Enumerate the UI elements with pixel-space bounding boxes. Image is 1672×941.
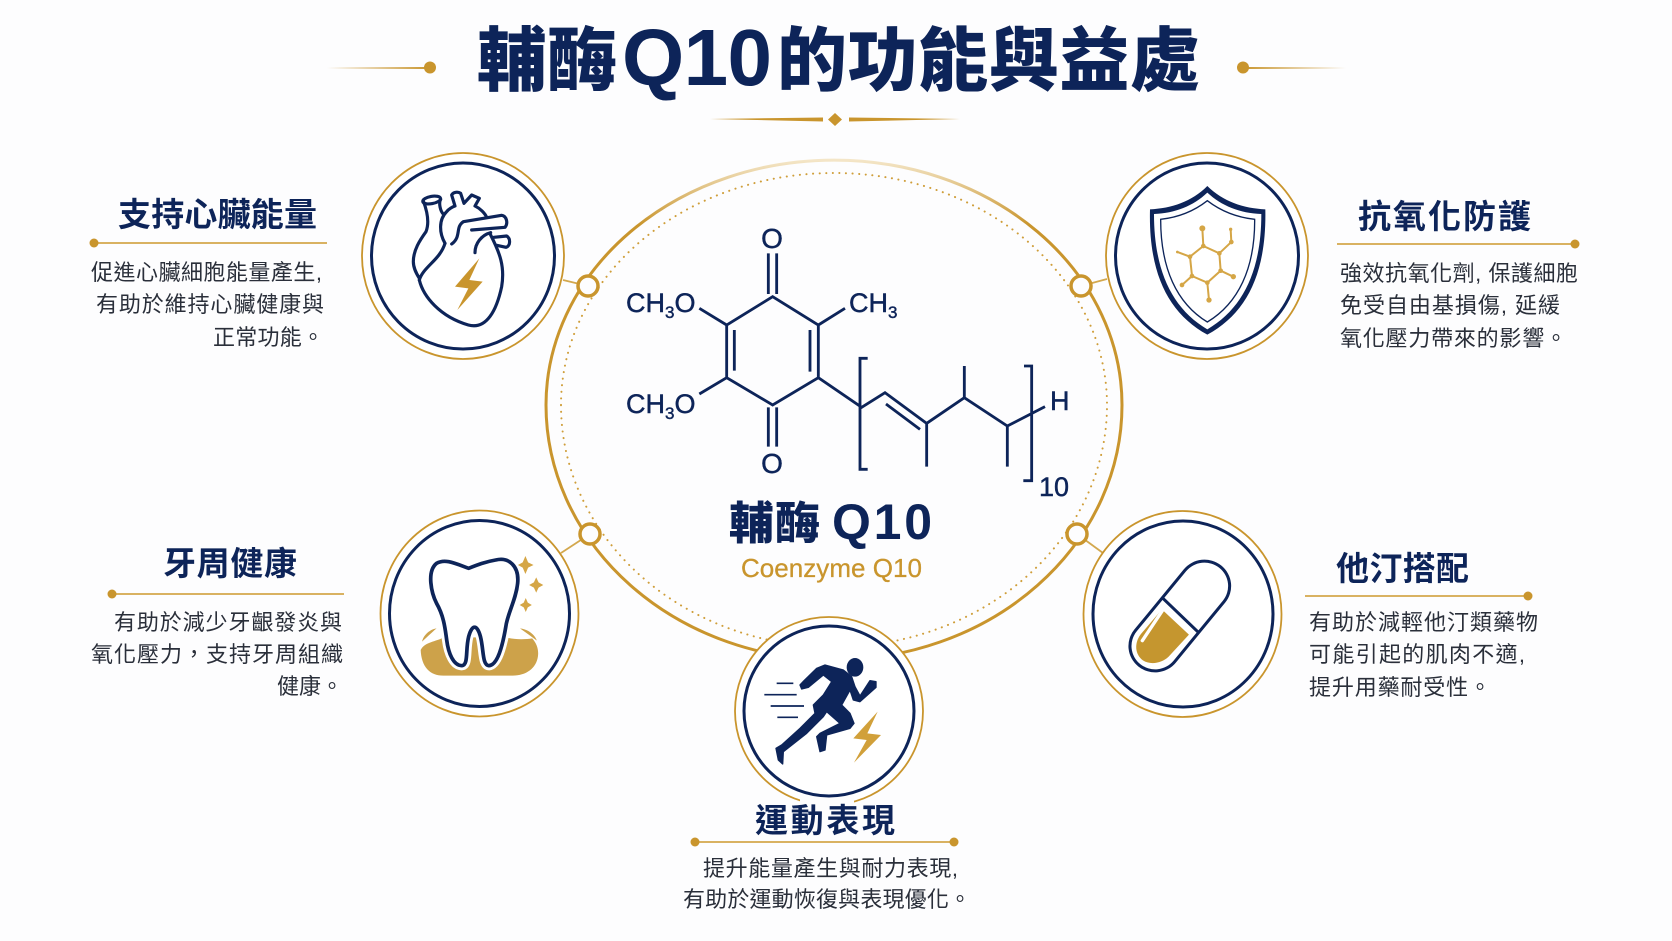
molecular structure of coenzyme Q10: O bbox=[761, 223, 783, 254]
molecular structure of coenzyme Q10: H bbox=[1050, 386, 1070, 416]
panel: heart bbox=[90, 153, 564, 359]
description bbox=[1340, 261, 1578, 353]
molecular structure of coenzyme Q10: O bbox=[674, 389, 695, 419]
molecular structure of coenzyme Q10: 3 bbox=[665, 303, 674, 322]
molecular structure of coenzyme Q10: 3 bbox=[665, 404, 674, 423]
heading: 運動表現: 運動表現 bbox=[755, 802, 895, 839]
panel: gum health bbox=[91, 510, 578, 716]
connector lines bbox=[561, 279, 1107, 553]
center label: 輔酶 bbox=[729, 498, 820, 549]
description bbox=[1309, 610, 1538, 702]
heading rule bbox=[108, 590, 344, 598]
description: 強效抗氧化劑, 保護細胞 bbox=[1340, 261, 1578, 286]
description bbox=[91, 260, 324, 352]
icon: heart bbox=[362, 153, 564, 359]
heading: 抗氧化防護: 抗氧化防護 bbox=[1358, 198, 1531, 235]
panel: athletic performance bbox=[683, 617, 971, 914]
heading rule bbox=[690, 838, 958, 846]
description: 有助於運動恢復與表現優化。 bbox=[683, 882, 971, 914]
description: 正常功能。 bbox=[213, 320, 324, 352]
title: Q10 bbox=[622, 13, 772, 102]
description: 健康。 bbox=[277, 669, 343, 701]
molecular structure of coenzyme Q10: O bbox=[674, 288, 695, 318]
title ornaments bbox=[327, 62, 1346, 126]
central ring bbox=[546, 160, 1122, 660]
panel: antioxidant bbox=[1106, 153, 1580, 359]
center label bbox=[729, 494, 932, 583]
description: 免受自由基損傷, 延緩 bbox=[1340, 293, 1560, 318]
title bbox=[477, 13, 1200, 102]
molecular structure of coenzyme Q10 bbox=[626, 223, 1070, 502]
molecular structure of coenzyme Q10: 10 bbox=[1039, 472, 1069, 502]
description: 有助於減輕他汀類藥物 bbox=[1309, 610, 1538, 635]
heading rule bbox=[1337, 240, 1580, 248]
icon: shield with molecule bbox=[1106, 153, 1308, 359]
panel: statin pairing bbox=[1084, 511, 1538, 717]
description bbox=[683, 856, 971, 914]
heading: 支持心臟能量: 支持心臟能量 bbox=[118, 196, 317, 233]
title: 的功能與益處 bbox=[777, 22, 1200, 100]
description bbox=[91, 610, 343, 701]
description: 提升用藥耐受性。 bbox=[1309, 670, 1491, 702]
description: 提升能量產生與耐力表現, bbox=[703, 856, 958, 881]
heading: 牙周健康: 牙周健康 bbox=[163, 545, 297, 582]
icon: tooth bbox=[380, 510, 578, 716]
description: 有助於維持心臟健康與 bbox=[96, 292, 324, 317]
title: 輔酶 bbox=[477, 22, 617, 100]
description: 氧化壓力帶來的影響。 bbox=[1340, 321, 1567, 353]
molecular structure of coenzyme Q10: CH bbox=[626, 389, 665, 419]
heading: 他汀搭配: 他汀搭配 bbox=[1336, 550, 1469, 587]
center label: Q10 bbox=[832, 494, 932, 550]
center label: Coenzyme Q10 bbox=[741, 553, 922, 583]
icon: capsule bbox=[1084, 511, 1282, 717]
molecular structure of coenzyme Q10: 3 bbox=[888, 303, 897, 322]
description: 可能引起的肌肉不適, bbox=[1309, 642, 1525, 667]
description: 有助於減少牙齦發炎與 bbox=[114, 610, 342, 635]
molecular structure of coenzyme Q10: CH bbox=[626, 288, 665, 318]
description: 氧化壓力，支持牙周組織 bbox=[91, 637, 343, 669]
heading rule bbox=[1305, 592, 1532, 600]
molecular structure of coenzyme Q10: CH bbox=[849, 288, 888, 318]
molecular structure of coenzyme Q10: O bbox=[761, 448, 783, 479]
icon: runner bbox=[735, 617, 923, 808]
description: 促進心臟細胞能量產生, bbox=[91, 260, 322, 285]
heading rule bbox=[90, 238, 327, 248]
